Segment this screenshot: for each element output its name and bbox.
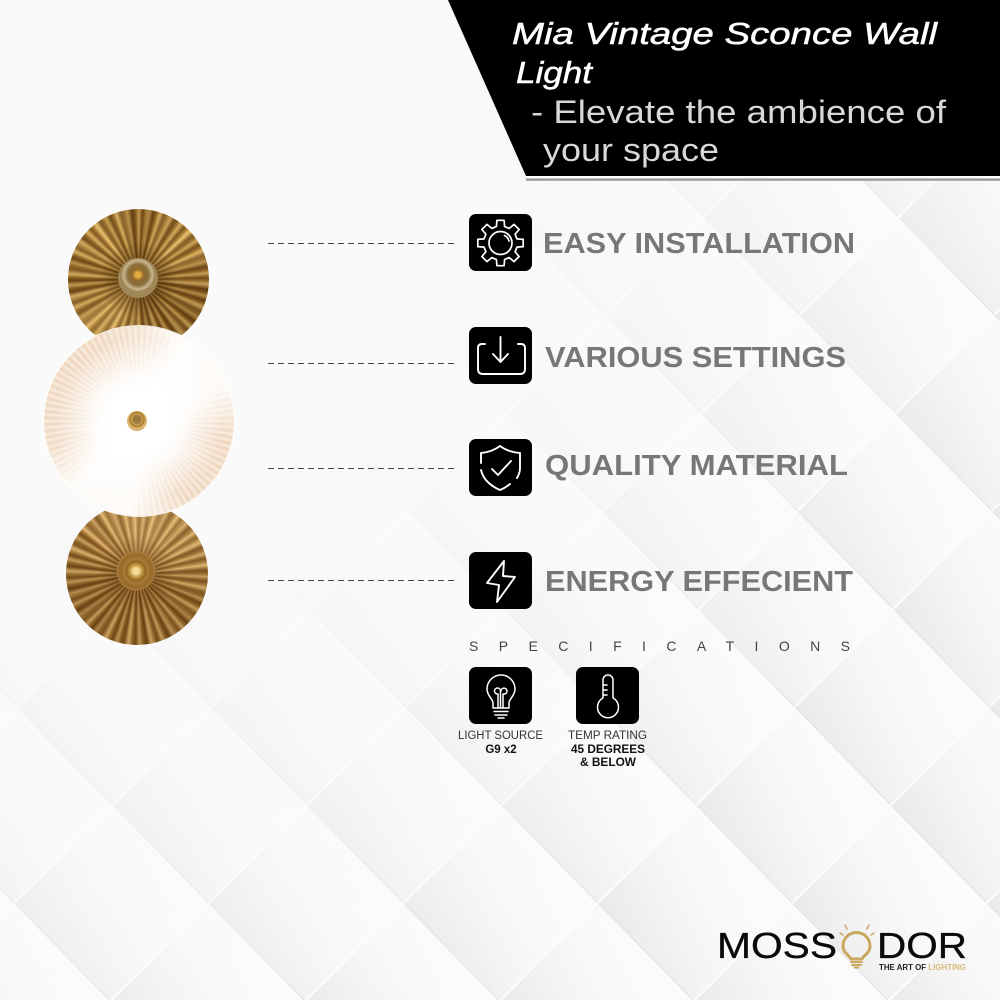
icon: gold bulb letter O <box>840 925 874 968</box>
feature: various settings <box>469 327 846 384</box>
title heading <box>512 16 938 90</box>
title heading: Light <box>516 55 594 90</box>
subtitle <box>531 94 946 168</box>
feature: quality material <box>469 439 848 496</box>
logo: Mossodor: MOSS <box>717 925 837 966</box>
leader lines <box>268 244 456 580</box>
icon: shield check <box>481 446 520 490</box>
logo: Mossodor: DOR <box>877 925 967 966</box>
spec: light source <box>458 667 543 756</box>
subtitle: - Elevate the ambience of <box>531 94 946 130</box>
value <box>571 744 645 769</box>
value: & BELOW <box>580 757 636 769</box>
brass knob: shade centre <box>127 411 147 431</box>
crystal hub: top disc <box>118 258 158 298</box>
icon: light bulb <box>487 675 515 718</box>
lamp: wall sconce with two gold discs and glowing glass shade <box>44 209 234 645</box>
logo: Mossodor <box>717 925 967 972</box>
glowing glass shade <box>44 326 234 516</box>
gold pleated disc: bottom <box>66 503 208 645</box>
label: LIGHT SOURCE <box>458 730 543 742</box>
specifications heading: SPECIFICATIONS <box>469 638 850 654</box>
label: QUALITY MATERIAL <box>545 450 848 482</box>
spec: temperature rating <box>568 667 647 769</box>
value: G9 x2 <box>485 744 517 756</box>
feature: easy installation <box>469 214 855 271</box>
icon: thermometer <box>598 675 618 718</box>
tagline: THE ART OF LIGHTING <box>879 963 966 972</box>
icon: lightning bolt <box>487 561 515 602</box>
feature: energy efficient <box>469 552 854 609</box>
gold pleated disc: top <box>68 209 209 350</box>
brass hub: bottom disc <box>116 551 156 591</box>
title heading: Mia Vintage Sconce Wall <box>512 16 938 51</box>
label: ENERGY EFFECIENT <box>545 566 854 598</box>
label: TEMP RATING <box>568 730 647 742</box>
label: EASY INSTALLATION <box>543 228 855 260</box>
icon: download tray <box>478 337 525 374</box>
subtitle: your space <box>543 132 719 168</box>
label: VARIOUS SETTINGS <box>545 342 846 374</box>
title banner <box>448 0 1000 181</box>
icon: gear <box>478 220 523 266</box>
value: 45 DEGREES <box>571 744 645 756</box>
